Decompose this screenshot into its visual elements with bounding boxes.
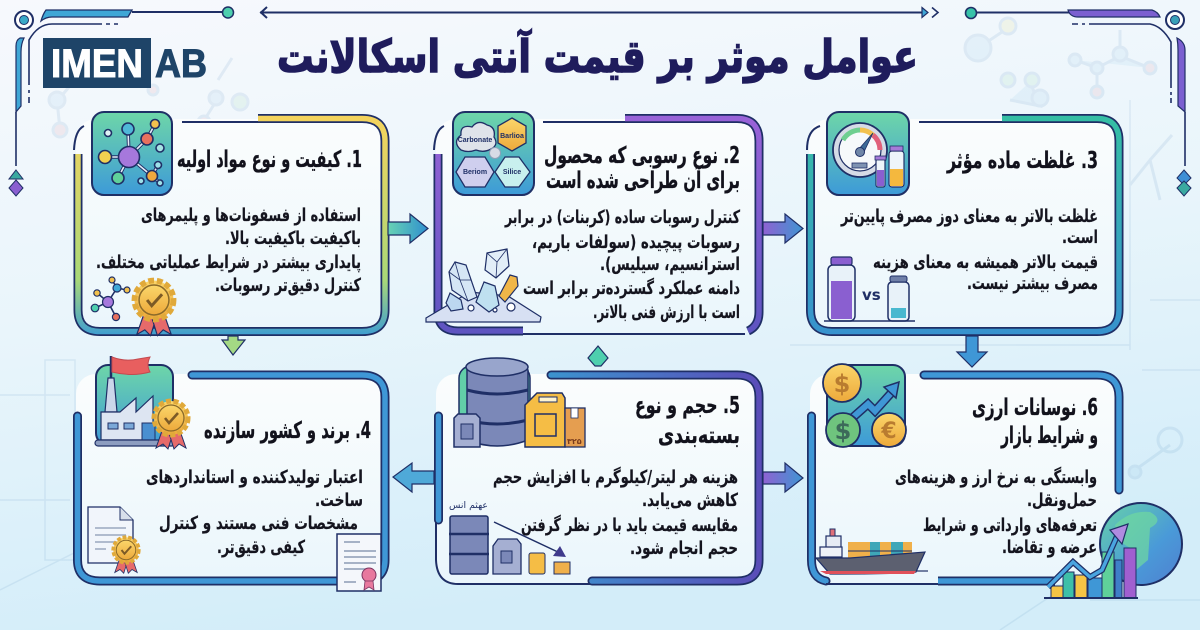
panel 5: packaging bbox=[436, 358, 760, 584]
icon: barrel and cans: ۳۲۵ bbox=[567, 437, 582, 446]
icon: volume comparison bbox=[449, 501, 570, 574]
panel 1: raw material quality bbox=[74, 112, 386, 336]
panel 4: brand and country bbox=[76, 356, 386, 591]
icon: volume comparison: عهثم انس bbox=[449, 501, 488, 511]
icon: scale types bbox=[453, 112, 534, 195]
body text 4: مشخصات فنی مستند و کنترل bbox=[159, 513, 358, 534]
body text 2: رسوبات پیچیده (سولفات باریم، bbox=[532, 232, 740, 253]
icon: document with seal bbox=[88, 507, 139, 573]
icon: scale types: Barlioa bbox=[500, 133, 524, 140]
arrow: panel 5 to panel 2 bbox=[588, 346, 608, 366]
heading 5: بسته‌بندی bbox=[658, 423, 740, 449]
icon: small molecule bbox=[91, 277, 130, 321]
body text 5: کاهش می‌یابد. bbox=[642, 490, 738, 511]
icon: quality badge bbox=[154, 401, 188, 449]
body text 1: باکیفیت باکیفیت بالا. bbox=[225, 228, 361, 249]
icon: currency coins: $ bbox=[835, 417, 851, 445]
icon: scale types: Beriom bbox=[463, 169, 487, 176]
arrow: panel 1 to panel 4 bbox=[222, 336, 245, 355]
body text 2: کنترل رسوبات ساده (کربنات) در برابر bbox=[504, 207, 740, 228]
icon: quality badge bbox=[134, 280, 174, 336]
heading 4: 4. برند و کشور سازنده bbox=[204, 418, 371, 444]
body text 5: حجم انجام شود. bbox=[630, 538, 738, 559]
icon: currency coins: $ bbox=[834, 370, 850, 398]
body text 3: قیمت بالاتر همیشه به معنای هزینه bbox=[873, 252, 1098, 273]
icon: container ship bbox=[816, 529, 928, 574]
icon: vials comparison bbox=[824, 257, 915, 321]
frame: top right corner ornament bbox=[966, 8, 1191, 196]
heading 6: و شرایط بازار bbox=[1000, 423, 1098, 449]
body text 6: وابستگی به نرخ ارز و هزینه‌های bbox=[895, 466, 1097, 488]
title: عوامل موثر بر قیمت آنتی اسکالانت bbox=[277, 29, 918, 83]
icon: factory and flag bbox=[95, 356, 175, 446]
icon: certificate bbox=[337, 534, 381, 591]
body text 5: هزینه هر لیتر/کیلوگرم با افزایش حجم bbox=[493, 466, 738, 488]
icon: barrel and cans bbox=[454, 358, 585, 447]
icon: scale types: Carbonate bbox=[458, 137, 492, 144]
panel 6: currency and market bbox=[810, 364, 1182, 598]
body text 3: است. bbox=[1062, 227, 1098, 248]
body text 1: پایداری بیشتر در شرایط عملیاتی مختلف. bbox=[96, 252, 361, 273]
body text 5 bbox=[493, 466, 738, 559]
icon: currency coins: € bbox=[880, 419, 897, 444]
body text 1: کنترل دقیق‌تر رسوبات. bbox=[215, 275, 361, 296]
panel 2: scale type bbox=[426, 112, 760, 334]
body text 4: اعتبار تولیدکننده و استانداردهای bbox=[146, 467, 363, 488]
icon: molecule bbox=[92, 112, 172, 195]
icon: gauge and vials bbox=[827, 112, 909, 195]
icon: crystals pile bbox=[426, 249, 541, 322]
icon: globe with growth chart bbox=[1044, 503, 1182, 598]
body text 3 bbox=[840, 206, 1098, 294]
body text 6: عرضه و تقاضا. bbox=[1002, 537, 1097, 558]
logo bbox=[43, 38, 207, 88]
body text 1: استفاده از فسفونات‌ها و پلیمرهای bbox=[141, 205, 361, 226]
heading 2 bbox=[544, 143, 740, 194]
body text 2 bbox=[504, 207, 740, 323]
body text 2: استرانسیم، سیلیس). bbox=[600, 254, 740, 275]
arrow: panel 3 to panel 6 bbox=[957, 336, 987, 367]
heading 3: 3. غلظت ماده مؤثر bbox=[946, 148, 1098, 174]
body text 6: تعرفه‌های وارداتی و شرایط bbox=[923, 515, 1097, 536]
arrow: panel 2 to panel 3 bbox=[763, 214, 803, 243]
body text 6: حمل‌ونقل. bbox=[1027, 490, 1097, 511]
heading 5 bbox=[635, 393, 740, 449]
heading 1: 1. کیفیت و نوع مواد اولیه bbox=[177, 147, 362, 173]
heading 6: 6. نوسانات ارزی bbox=[972, 395, 1098, 421]
heading 2: برای آن طراحی شده است bbox=[546, 165, 740, 194]
body text 5: مقایسه قیمت باید با در نظر گرفتن bbox=[521, 514, 738, 536]
frame: top left corner ornament bbox=[9, 7, 234, 196]
logo: IMEN bbox=[51, 42, 143, 86]
heading 6 bbox=[972, 395, 1098, 449]
icon: currency coins bbox=[823, 364, 906, 447]
arrow: panel 1 to panel 2 bbox=[388, 214, 428, 243]
arrow: panel 5 to panel 6 bbox=[763, 463, 803, 492]
body text 3: غلظت بالاتر به معنای دوز مصرف پایین‌تر bbox=[840, 206, 1098, 227]
body text 4: کیفی دقیق‌تر. bbox=[217, 537, 305, 558]
heading 5: 5. حجم و نوع bbox=[635, 393, 740, 419]
icon: vials comparison: vs bbox=[862, 286, 881, 304]
panel 3: concentration bbox=[807, 112, 1120, 334]
frame: top center arrow line bbox=[260, 7, 938, 18]
body text 3: مصرف بیشتر نیست. bbox=[967, 273, 1098, 294]
body text 2: است با ارزش فنی بالاتر. bbox=[593, 302, 740, 323]
body text 2: دامنه عملکرد گسترده‌تر برابر است bbox=[523, 277, 740, 299]
icon: scale types: Silice bbox=[503, 169, 521, 176]
body text 1 bbox=[96, 205, 361, 296]
body text 4 bbox=[146, 467, 363, 558]
body text 6 bbox=[895, 466, 1097, 558]
heading 2: 2. نوع رسوبی که محصول bbox=[544, 143, 740, 169]
logo: AB bbox=[155, 42, 207, 86]
body text 4: ساخت. bbox=[315, 490, 363, 511]
arrow: panel 5 to panel 4 bbox=[393, 463, 434, 492]
